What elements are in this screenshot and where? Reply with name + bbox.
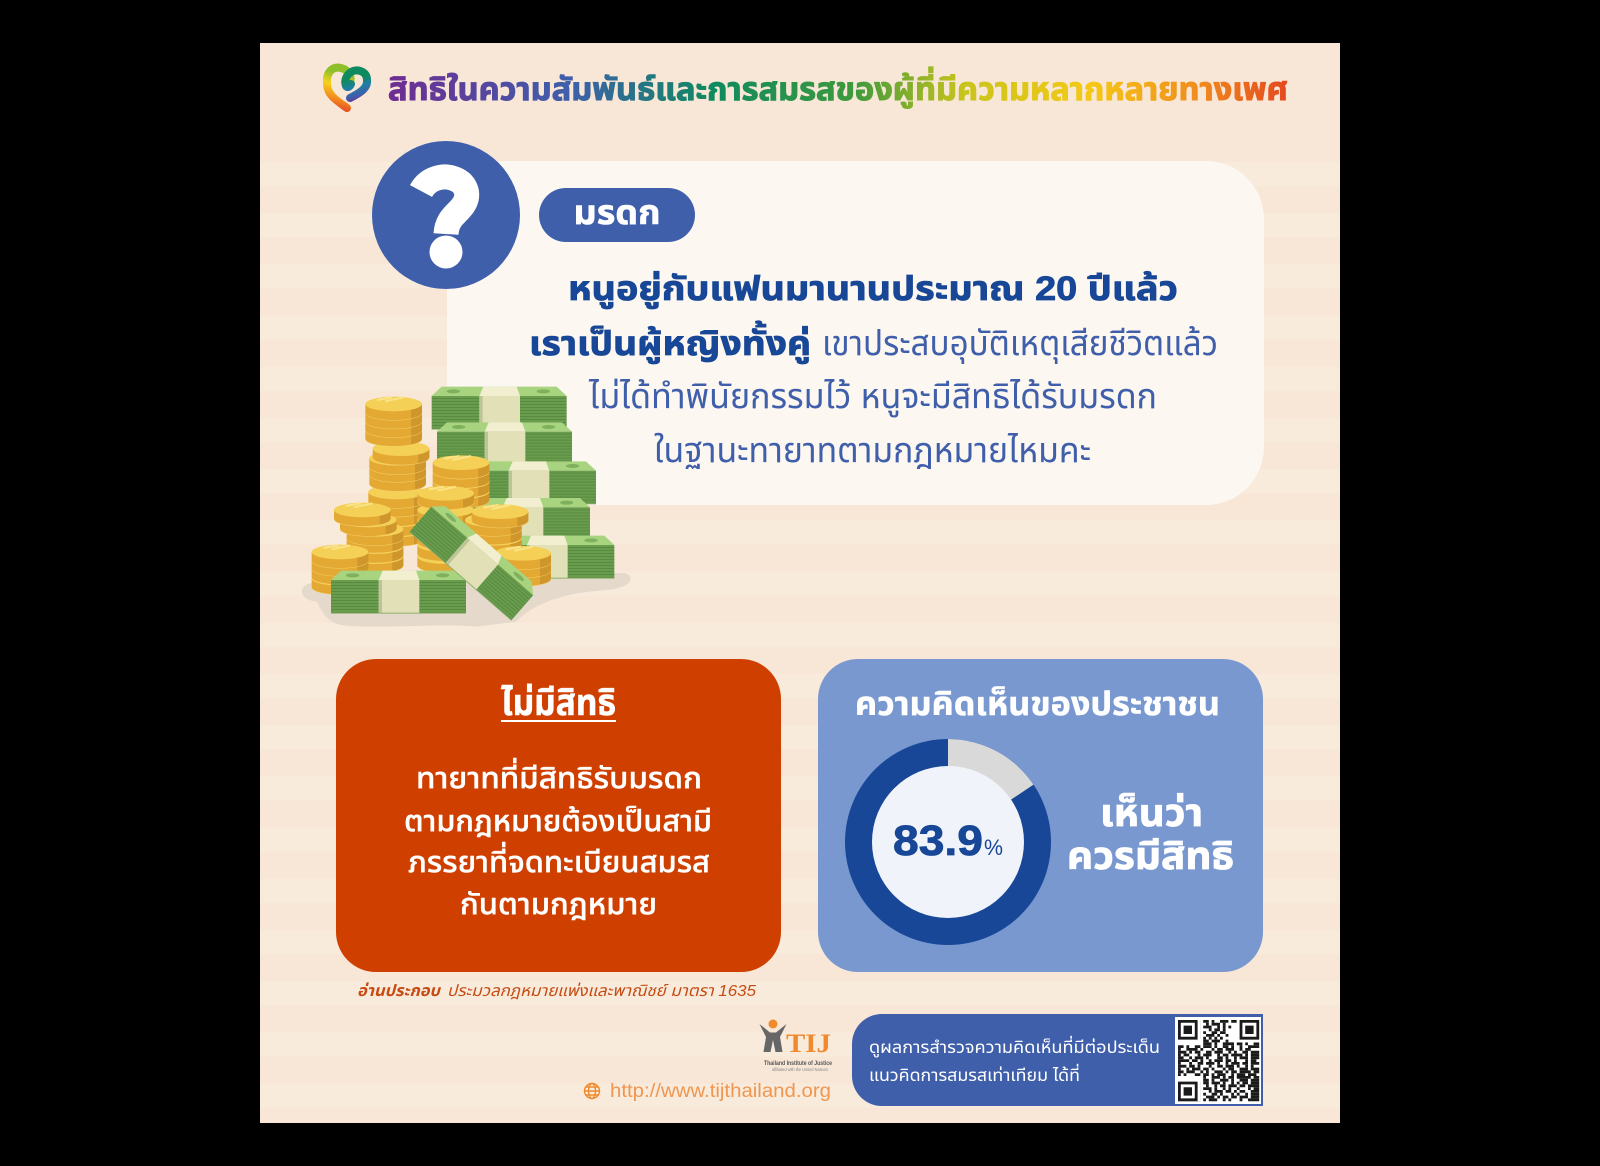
heading: public opinion: ความคิดเห็นของประชาชน [855, 685, 1220, 722]
question text [529, 270, 1218, 470]
heading: no right: ไม่มีสิทธิ [501, 682, 616, 723]
donut label: ควรมีสิทธิ [1067, 836, 1234, 878]
donut chart: % [984, 835, 1003, 860]
question text: ในฐานะทายาทตามกฎหมายไหมคะ [654, 431, 1091, 470]
question text: ไม่ได้ทำพินัยกรรมไว้ หนูจะมีสิทธิได้รับมรดก [588, 377, 1157, 417]
topic pill [539, 188, 695, 242]
panel: legal answer [336, 659, 781, 972]
question card [447, 161, 1264, 505]
explanation text: กันตามกฎหมาย [460, 888, 657, 921]
TIJ logo: affiliated with the United Nations [772, 1067, 829, 1072]
question text: เขาประสบอุบัติเหตุเสียชีวิตแล้ว [822, 324, 1218, 364]
TIJ logo: TIJ [786, 1029, 831, 1058]
icon: question mark [372, 141, 520, 289]
donut chart [845, 739, 1051, 945]
legal reference note: อ่านประกอบ [357, 982, 442, 1000]
rainbow heart logo [327, 68, 367, 108]
TIJ logo: Thailand Institute of Justice [764, 1061, 833, 1067]
infographic background panel [260, 43, 1340, 1123]
explanation text [404, 758, 712, 921]
donut label: เห็นว่า [1100, 793, 1203, 835]
panel: public opinion [818, 659, 1263, 972]
survey callout: ดูผลการสำรวจความคิดเห็นที่มีต่อประเด็น [869, 1035, 1160, 1059]
illustration: money and coins [302, 387, 631, 627]
explanation text: ทายาทที่มีสิทธิรับมรดก [416, 758, 702, 795]
topic pill: มรดก [574, 194, 660, 232]
survey callout [852, 1014, 1263, 1106]
TIJ logo [760, 1020, 833, 1072]
explanation text: ภรรยาที่จดทะเบียนสมรส [408, 842, 710, 879]
legal reference note: ประมวลกฎหมายแพ่งและพาณิชย์ มาตรา 1635 [447, 982, 756, 1000]
donut label [1067, 793, 1234, 878]
QR code [1175, 1017, 1261, 1104]
question text: หนูอยู่กับแฟนมานานประมาณ 20 ปีแล้ว [568, 270, 1178, 309]
survey callout: แนวคิดการสมรสเท่าเทียม ได้ที่ [869, 1063, 1080, 1085]
question text: เราเป็นผู้หญิงทั้งคู่ [529, 320, 811, 364]
legal reference note [357, 982, 756, 1000]
donut chart: 83.9 [893, 817, 983, 865]
title: สิทธิในความสัมพันธ์และการสมรสของผู้ที่มีความหลากหลายทางเพศ [388, 66, 1288, 108]
explanation text: ตามกฎหมายต้องเป็นสามี [404, 805, 712, 838]
website link: http://www.tijthailand.org [610, 1081, 831, 1102]
